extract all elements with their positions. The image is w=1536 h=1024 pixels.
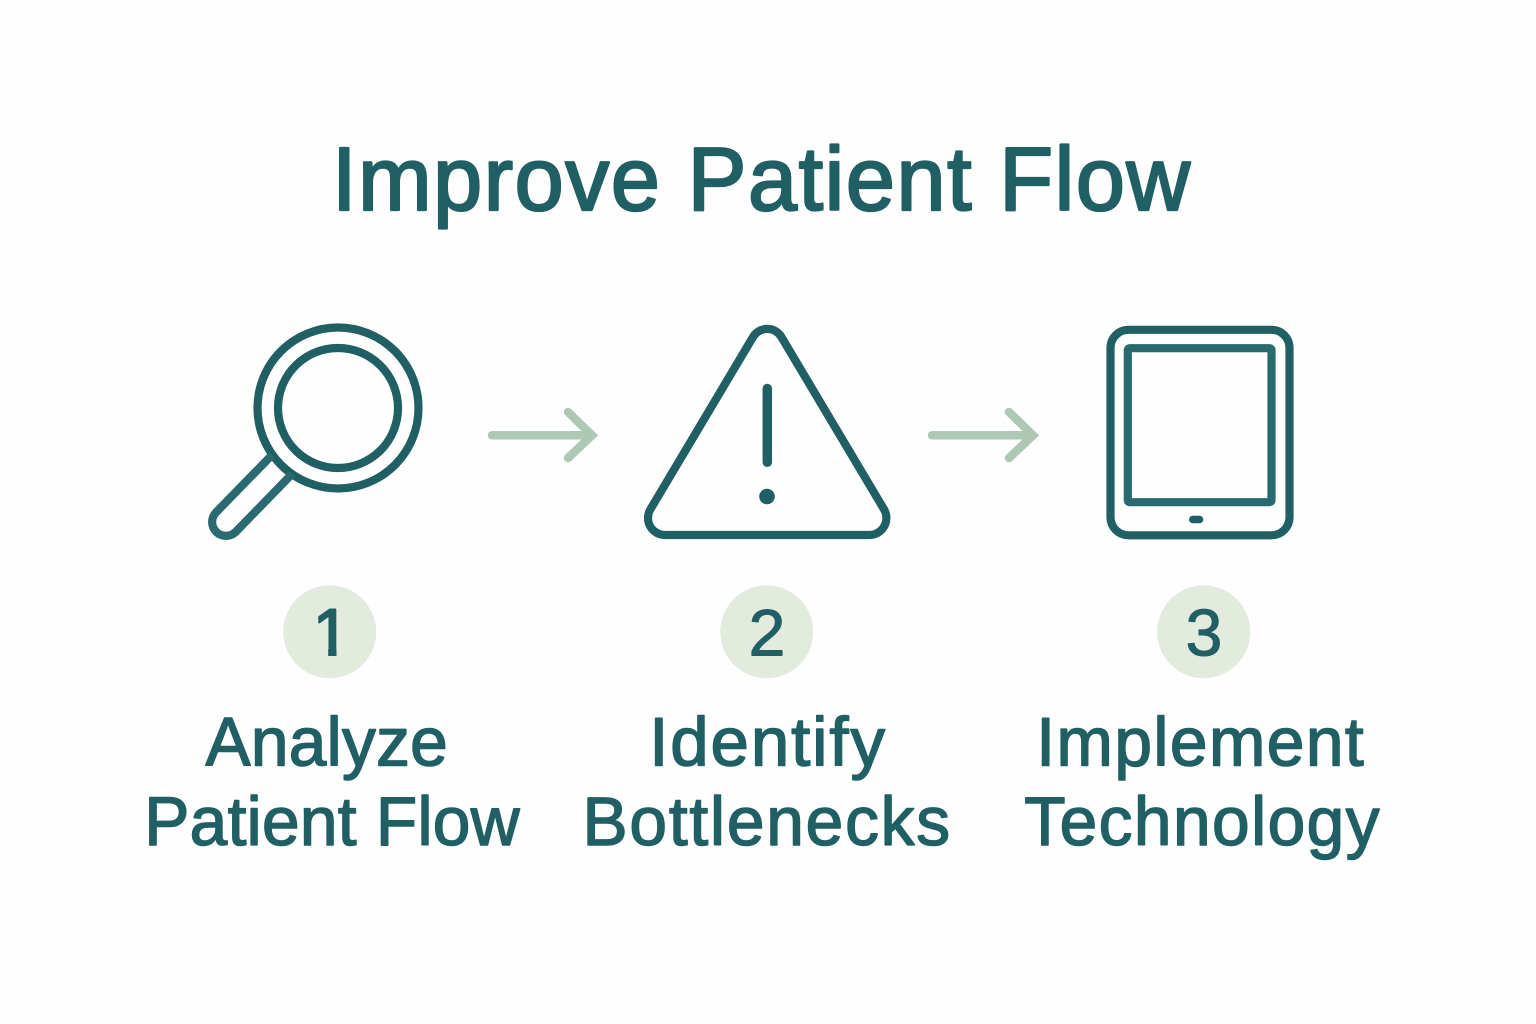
icon: magnifying glass — [212, 328, 418, 536]
icon: warning triangle — [648, 329, 886, 535]
step 1 number badge: 1 — [313, 595, 350, 669]
step 3 label: Technology — [1024, 783, 1381, 860]
step 2 label: Identify — [649, 704, 887, 780]
step 2 label — [582, 704, 952, 860]
step 1 label: Analyze — [206, 704, 448, 781]
step 2 label: Bottlenecks — [582, 783, 952, 860]
step 2 number badge — [720, 585, 813, 678]
step 3 number badge — [1157, 585, 1250, 678]
arrow: step 1 to step 2 — [492, 412, 592, 458]
icon: tablet — [1110, 330, 1290, 535]
step 1 number badge — [283, 585, 376, 678]
arrow: step 2 to step 3 — [932, 412, 1033, 458]
step 3 label — [1024, 704, 1381, 860]
step 3 label: Implement — [1036, 704, 1365, 781]
step 1 label: Patient Flow — [144, 783, 520, 860]
step 2 number badge: 2 — [749, 596, 785, 670]
step 3 number badge: 3 — [1186, 596, 1222, 670]
step 1 label — [144, 704, 520, 860]
title: Improve Patient Flow — [332, 128, 1192, 229]
